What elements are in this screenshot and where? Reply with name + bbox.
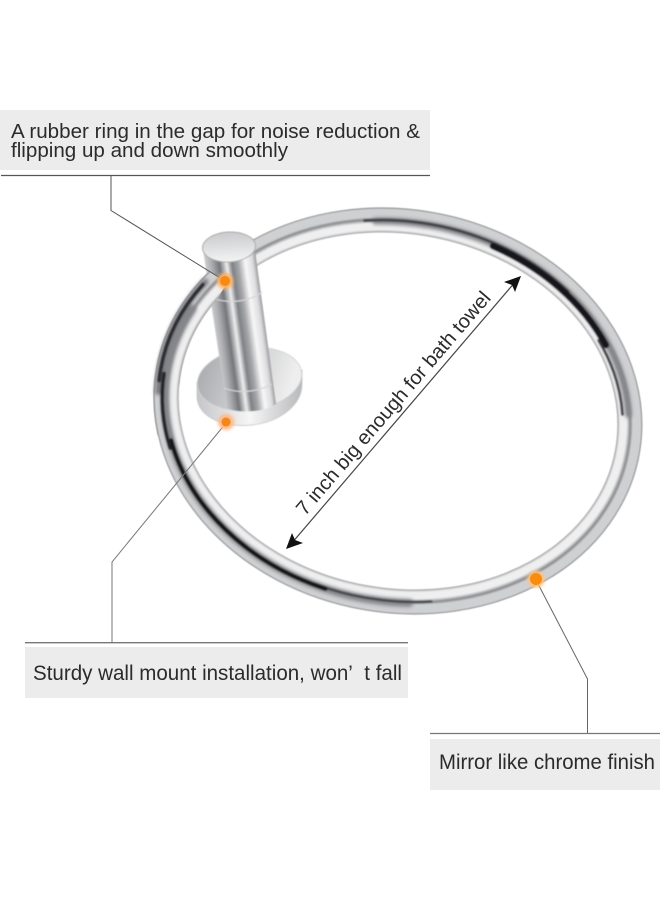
label panel xyxy=(25,647,408,698)
wall mount post and base xyxy=(193,231,306,426)
orange marker: chrome finish xyxy=(528,570,544,588)
base disc xyxy=(193,341,306,426)
diameter arrow xyxy=(286,276,521,549)
label panel xyxy=(0,110,430,170)
callout: wall mount xyxy=(25,423,408,698)
callout: chrome finish xyxy=(430,580,660,790)
leader line xyxy=(111,175,225,281)
ring end over post xyxy=(152,272,224,436)
label text xyxy=(11,120,420,162)
orange marker: wall mount xyxy=(218,414,234,430)
divider rule xyxy=(430,732,660,734)
divider rule xyxy=(1,174,430,176)
leader line xyxy=(112,423,226,642)
label text: flipping up and down smoothly xyxy=(11,139,289,162)
label text: Mirror like chrome finish xyxy=(439,751,655,774)
infographic canvas xyxy=(0,110,660,790)
divider rule xyxy=(25,642,408,644)
post cylinder xyxy=(203,250,276,411)
label text: Sturdy wall mount installation, won’ t fall xyxy=(33,662,402,685)
diameter label: 7 inch big enough for bath towel xyxy=(292,288,496,520)
label text: A rubber ring in the gap for noise reduction & xyxy=(11,120,420,143)
leader line xyxy=(536,580,588,733)
orange marker: rubber ring xyxy=(217,273,233,289)
callout: rubber ring xyxy=(0,110,430,281)
towel ring xyxy=(122,170,660,652)
post top cap xyxy=(202,231,256,263)
label panel xyxy=(430,739,660,790)
post collar seam xyxy=(212,292,272,391)
